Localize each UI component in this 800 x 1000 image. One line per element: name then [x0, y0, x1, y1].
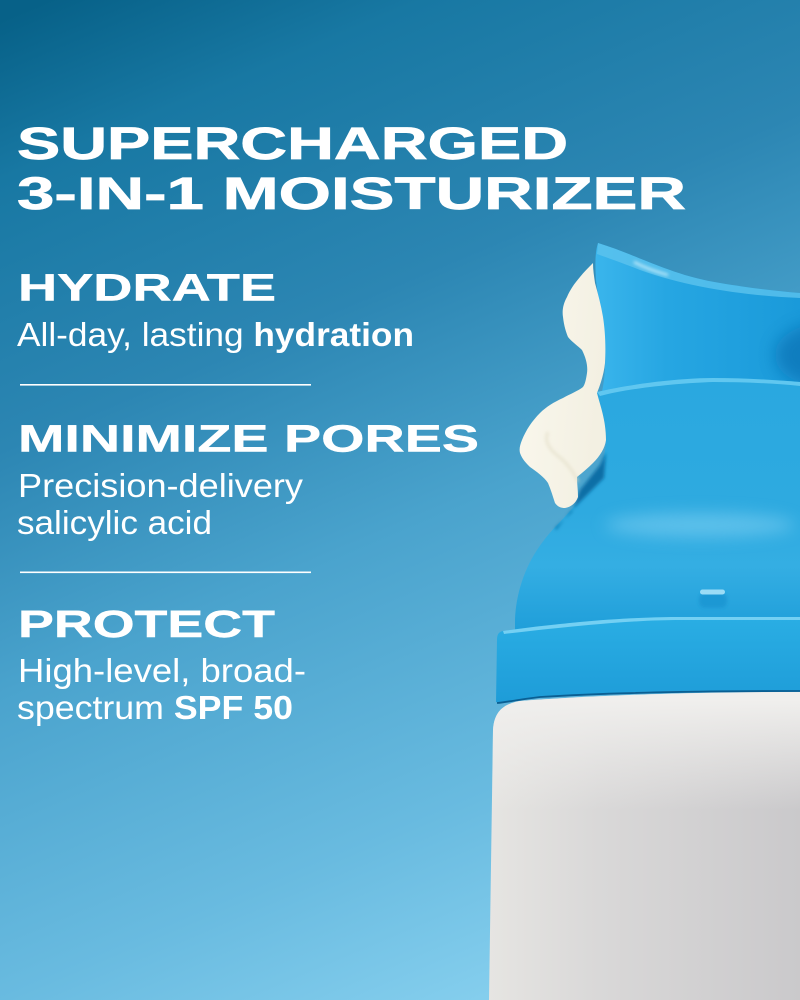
benefit: hydrate — [17, 268, 414, 353]
collar ring — [496, 617, 800, 702]
main title: SUPERCHARGED — [17, 118, 568, 169]
main title — [17, 118, 686, 219]
lower cap edge highlight — [597, 378, 800, 396]
lower cap — [515, 378, 800, 640]
main title: 3-IN-1 MOISTURIZER — [17, 168, 686, 219]
upper cap — [595, 243, 800, 400]
benefit: minimize pores: salicylic acid — [17, 504, 212, 541]
benefit: protect — [17, 604, 306, 726]
benefit: protect: spectrum SPF 50 — [17, 689, 293, 726]
cream — [520, 263, 606, 508]
cap dark side — [775, 323, 800, 387]
benefit: protect: High-level, broad- — [18, 652, 306, 689]
lower cap glow — [605, 513, 795, 537]
cap top highlight — [597, 243, 800, 298]
benefit: hydrate: All-day, lasting hydration — [17, 316, 414, 353]
bottle body — [489, 692, 800, 1000]
benefit: minimize pores: MINIMIZE PORES — [18, 418, 479, 460]
benefit: minimize pores: Precision-delivery — [18, 467, 304, 504]
bottle top sheen — [492, 692, 800, 810]
collar top highlight — [503, 617, 800, 634]
shadow under cream — [555, 452, 606, 530]
cap shine — [634, 262, 668, 275]
benefit: hydrate: HYDRATE — [18, 268, 276, 310]
benefit: minimize pores — [17, 418, 479, 541]
benefit: protect: PROTECT — [18, 604, 275, 646]
cream fold shading — [546, 432, 578, 482]
collar bottom shadow — [497, 691, 800, 703]
product: moisturizer bottle — [489, 243, 800, 1000]
cap nub — [699, 590, 727, 608]
